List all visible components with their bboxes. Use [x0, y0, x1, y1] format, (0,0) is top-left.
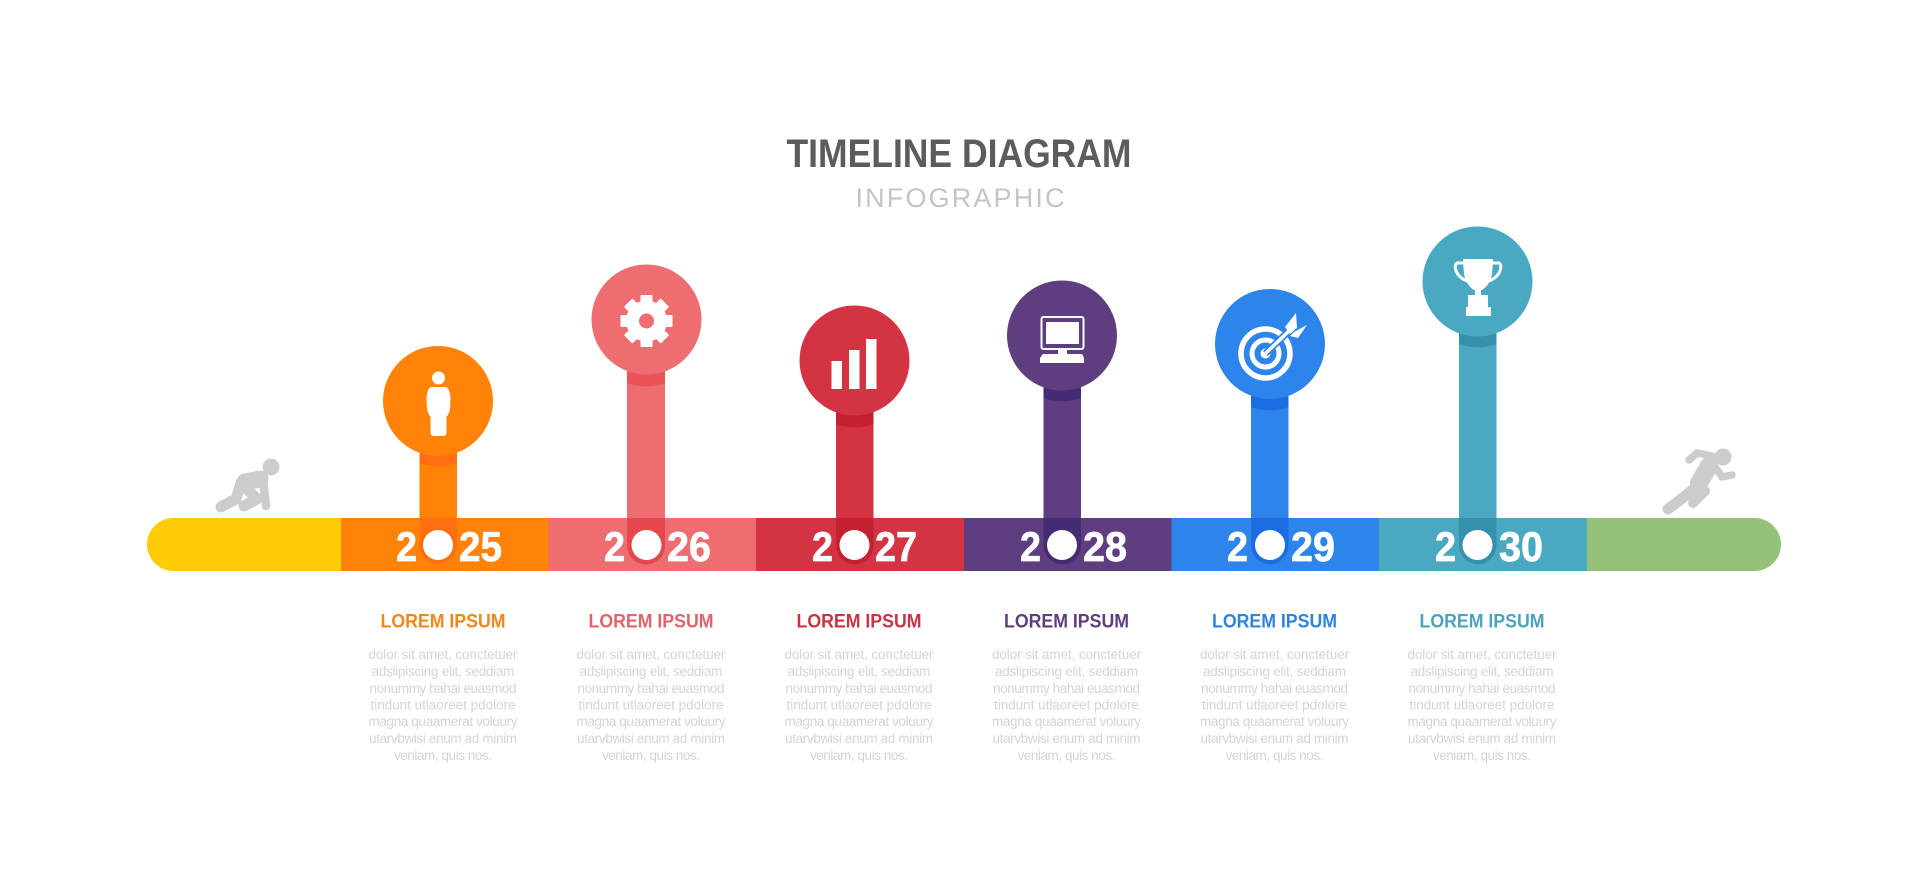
caption 2027 [784, 612, 934, 763]
year [396, 523, 502, 570]
caption 2026: adslipiscing elit, seddiam [580, 664, 722, 679]
caption 2030 [1408, 612, 1557, 763]
title: TIMELINE DIAGRAM [786, 132, 1132, 176]
stem overlap on bar [627, 518, 665, 564]
year: 26 [667, 523, 711, 570]
caption 2029: nonummy hahai euasmod [1201, 681, 1348, 696]
icon: bar chart [832, 339, 876, 389]
bar start segment [147, 518, 341, 571]
caption 2026: LOREM IPSUM [588, 612, 714, 632]
caption 2025: utarvbwisi enum ad minim [369, 731, 517, 746]
icon: person [426, 372, 450, 436]
stem [1251, 388, 1288, 523]
dot [1047, 530, 1077, 560]
caption 2029: dolor sit amet, conctetuer [1200, 647, 1350, 662]
dot [840, 530, 870, 560]
year: 2 [1020, 523, 1041, 570]
segment 2025 [341, 518, 549, 571]
segment 2029 [1172, 518, 1380, 571]
stem shadow band [1251, 395, 1288, 410]
caption 2029 [1200, 612, 1350, 763]
caption 2025: tindunt utlaoreet pdolore [370, 698, 516, 712]
caption 2028: veniam, quis nos. [1018, 748, 1116, 763]
caption 2026: dolor sit amet, conctetuer [576, 647, 726, 662]
caption 2027: tindunt utlaoreet pdolore [786, 698, 932, 712]
year [1020, 523, 1127, 570]
caption 2027: LOREM IPSUM [796, 612, 922, 632]
year [1435, 523, 1543, 570]
stem [420, 445, 457, 525]
stem shadow band [1044, 385, 1081, 401]
subtitle: INFOGRAPHIC [856, 183, 1064, 213]
caption 2028: adslipiscing elit, seddiam [995, 664, 1138, 679]
segment 2030 [1379, 518, 1587, 571]
year: 2 [812, 523, 833, 570]
caption 2025 [368, 612, 518, 763]
caption 2030: utarvbwisi enum ad minim [1408, 731, 1556, 746]
year: 25 [459, 523, 502, 570]
caption 2029: LOREM IPSUM [1212, 612, 1337, 632]
caption 2027: adslipiscing elit, seddiam [788, 664, 930, 679]
caption 2029: tindunt utlaoreet pdolore [1202, 698, 1347, 712]
caption 2028: utarvbwisi enum ad minim [992, 731, 1140, 746]
icon: computer [1040, 317, 1084, 363]
caption 2030: LOREM IPSUM [1420, 612, 1544, 632]
icon: target with arrow [1241, 313, 1307, 378]
dot [423, 530, 453, 560]
stem shadow band [420, 450, 457, 466]
circle [592, 264, 702, 374]
segment 2027 [756, 518, 964, 571]
icon: gear [620, 295, 672, 347]
segment 2028 [964, 518, 1172, 571]
caption 2028: dolor sit amet, conctetuer [992, 647, 1142, 662]
caption 2025: dolor sit amet, conctetuer [368, 647, 518, 662]
dot [1255, 530, 1285, 560]
milestone 2028 [1007, 280, 1127, 570]
milestone 2027 [800, 306, 917, 570]
circle [1007, 280, 1117, 390]
caption 2028: nonummy hahai euasmod [993, 681, 1140, 696]
icon: crouching runner [221, 458, 280, 507]
caption 2027: magna quaamerat voluury [784, 714, 934, 729]
caption 2026: veniam, quis nos. [602, 748, 700, 763]
circle [383, 346, 493, 456]
caption 2026: utarvbwisi enum ad minim [577, 731, 725, 746]
caption 2027: utarvbwisi enum ad minim [785, 731, 933, 746]
dot [632, 530, 662, 560]
caption 2030: dolor sit amet, conctetuer [1408, 647, 1557, 662]
caption 2026: nonummy hahai euasmod [578, 681, 724, 696]
caption 2030: veniam, quis nos. [1433, 748, 1531, 763]
caption 2029: veniam, quis nos. [1226, 748, 1324, 763]
circle [1215, 289, 1325, 399]
year: 2 [396, 523, 417, 570]
year: 2 [604, 523, 625, 570]
caption 2026 [576, 612, 726, 763]
stem overlap on bar [1044, 518, 1081, 564]
circle [800, 306, 910, 416]
stem overlap on bar [836, 518, 874, 564]
caption 2029: utarvbwisi enum ad minim [1200, 731, 1348, 746]
caption 2029: adslipiscing elit, seddiam [1203, 664, 1346, 679]
icon: sprinting runner [1668, 448, 1732, 509]
stem shadow band [1459, 330, 1496, 347]
caption 2026: tindunt utlaoreet pdolore [578, 698, 724, 712]
stem shadow band [836, 410, 874, 427]
caption 2025: nonummy hahai euasmod [370, 681, 516, 696]
year: 2 [1227, 523, 1248, 570]
year [604, 523, 711, 570]
caption 2030: nonummy hahai euasmod [1408, 681, 1556, 696]
stem overlap on bar [1251, 518, 1288, 564]
icon: trophy [1455, 259, 1501, 316]
milestone 2029 [1215, 289, 1335, 570]
stem overlap on bar [420, 518, 457, 564]
stem [627, 363, 665, 523]
milestone 2025 [383, 346, 502, 570]
caption 2030: magna quaamerat voluury [1408, 714, 1557, 729]
caption 2027: veniam, quis nos. [810, 748, 908, 763]
caption 2029: magna quaamerat voluury [1200, 714, 1349, 729]
year: 30 [1499, 523, 1543, 570]
year: 27 [875, 523, 917, 570]
bar end segment [1587, 518, 1781, 571]
timeline bar [147, 518, 1781, 571]
stem [1044, 380, 1081, 525]
milestone 2026 [592, 264, 711, 570]
caption 2028: LOREM IPSUM [1004, 612, 1129, 632]
dot [1462, 530, 1492, 560]
caption 2025: magna quaamerat voluury [368, 714, 518, 729]
caption 2027: dolor sit amet, conctetuer [784, 647, 934, 662]
caption 2028: magna quaamerat voluury [992, 714, 1141, 729]
caption 2028: tindunt utlaoreet pdolore [994, 698, 1139, 712]
stem [836, 404, 874, 524]
caption 2028 [992, 612, 1142, 763]
stem [1459, 325, 1496, 525]
year [812, 523, 917, 570]
milestone 2030 [1422, 226, 1543, 570]
caption 2025: LOREM IPSUM [380, 612, 506, 632]
caption 2025: veniam, quis nos. [394, 748, 492, 763]
year [1227, 523, 1335, 570]
year: 28 [1083, 523, 1127, 570]
caption 2030: tindunt utlaoreet pdolore [1410, 698, 1554, 712]
stem overlap on bar [1459, 518, 1496, 564]
caption 2025: adslipiscing elit, seddiam [372, 664, 514, 679]
year: 2 [1435, 523, 1456, 570]
caption 2030: adslipiscing elit, seddiam [1410, 664, 1554, 679]
stem shadow band [627, 370, 665, 386]
caption 2027: nonummy hahai euasmod [786, 681, 932, 696]
caption 2026: magna quaamerat voluury [576, 714, 726, 729]
segment 2026 [548, 518, 756, 571]
year: 29 [1291, 523, 1335, 570]
circle [1422, 226, 1532, 336]
